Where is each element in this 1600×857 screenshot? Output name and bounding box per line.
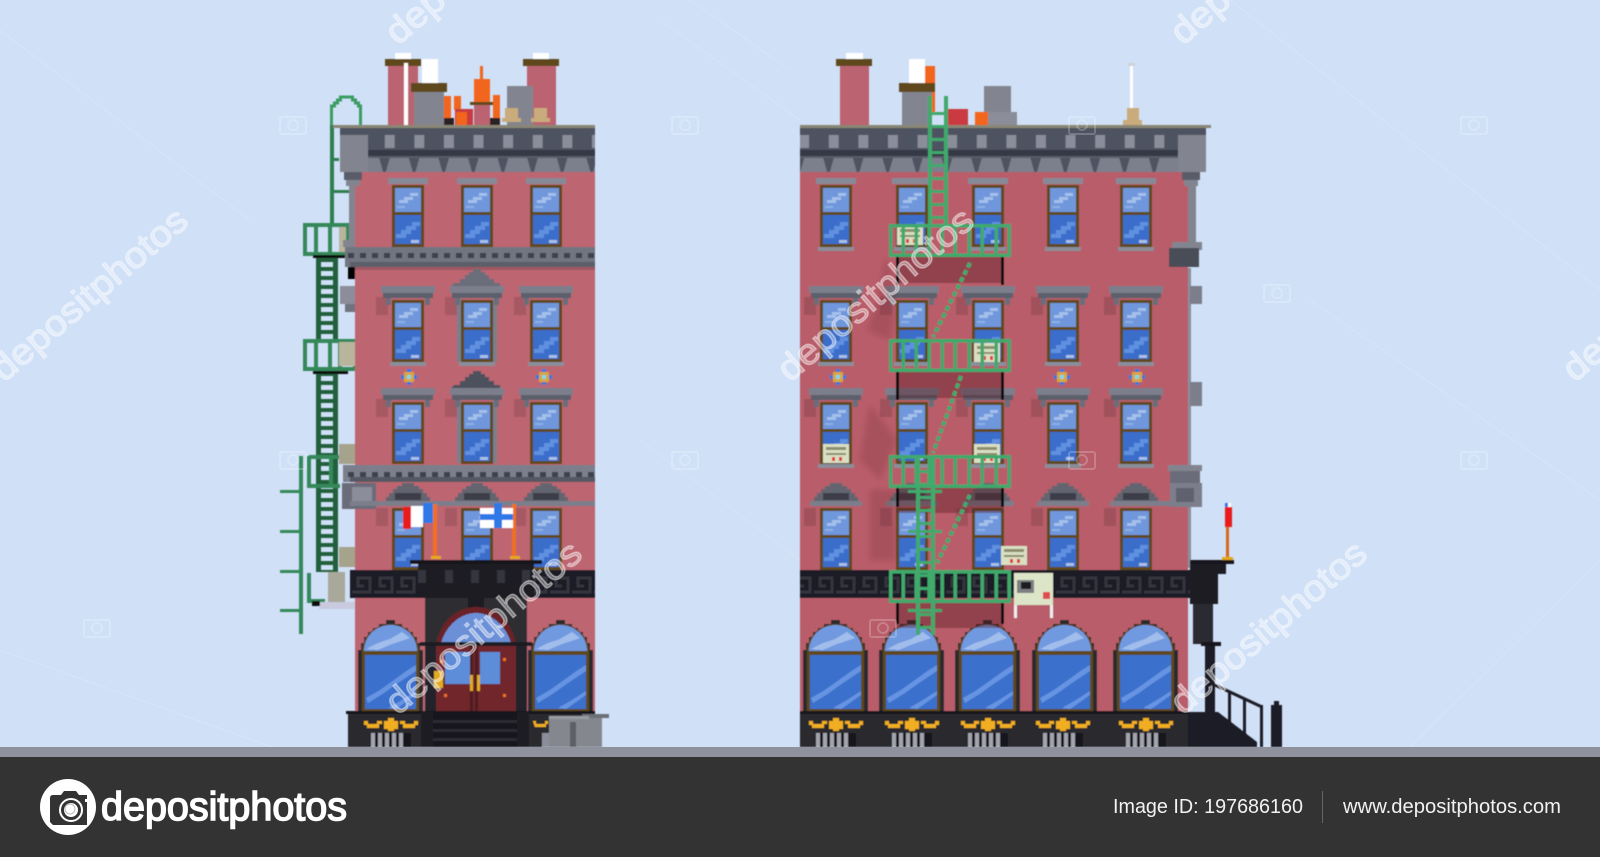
left black frieze bbox=[350, 570, 595, 598]
left flags bbox=[403, 503, 520, 559]
footer logo wordmark: depositphotos bbox=[101, 785, 347, 829]
right chimneys and rooftop objects bbox=[836, 53, 1142, 125]
right windows row 4 bbox=[804, 483, 1162, 570]
left side fire escape bbox=[280, 97, 360, 634]
right cornice bbox=[800, 125, 1211, 242]
left cornice bbox=[333, 125, 595, 247]
footer divider bbox=[1322, 791, 1323, 823]
left chimneys and rooftop objects bbox=[385, 53, 559, 125]
right stoop column and railing bbox=[1188, 560, 1282, 747]
fire escape shadows bbox=[860, 257, 1003, 628]
right windows row 3 bbox=[804, 388, 1163, 468]
wall-mounted unit bbox=[1014, 573, 1053, 618]
left ornament diamonds bbox=[401, 369, 552, 385]
left windows row 1 bbox=[388, 178, 566, 247]
watermark camera icons bbox=[84, 117, 1487, 637]
left windows row 4 bbox=[350, 483, 595, 570]
right lower side bracket bbox=[1155, 465, 1202, 507]
watermarks: depositphotos bbox=[769, 199, 981, 389]
trash bin bbox=[549, 714, 609, 747]
footer image id: Image ID: 197686160 bbox=[1113, 796, 1303, 818]
right arched windows bbox=[803, 620, 1178, 711]
watermarks: depositphotos bbox=[1162, 532, 1374, 722]
right windows row 2 bbox=[804, 286, 1163, 366]
left base with stoop bbox=[346, 711, 595, 747]
right wall bbox=[800, 170, 1188, 712]
right upper side bracket bbox=[1169, 242, 1202, 267]
left wall bbox=[355, 172, 595, 712]
right base bbox=[800, 711, 1188, 747]
small red flag bbox=[1222, 503, 1233, 560]
footer logo camera bbox=[40, 779, 96, 835]
building right bbox=[800, 53, 1282, 747]
left arched windows bbox=[358, 620, 593, 711]
left windows row 3 bbox=[376, 371, 573, 464]
air conditioners bbox=[823, 226, 1027, 565]
footer bar bbox=[0, 757, 1600, 857]
building left bbox=[280, 53, 609, 747]
ground strip bbox=[0, 747, 1600, 757]
left string course upper bbox=[345, 247, 595, 270]
watermarks: depositphotos bbox=[377, 532, 589, 722]
entrance portico bbox=[410, 560, 542, 712]
right windows row 1 bbox=[816, 178, 1156, 251]
left string course lower bbox=[342, 465, 595, 509]
footer website: www.depositphotos.com bbox=[1342, 796, 1561, 818]
right wall side edge bbox=[1188, 268, 1202, 568]
right ornament diamonds bbox=[830, 369, 1145, 385]
right black frieze bbox=[800, 570, 1212, 598]
left windows row 2 bbox=[376, 269, 573, 366]
front fire escape bbox=[891, 96, 1009, 635]
